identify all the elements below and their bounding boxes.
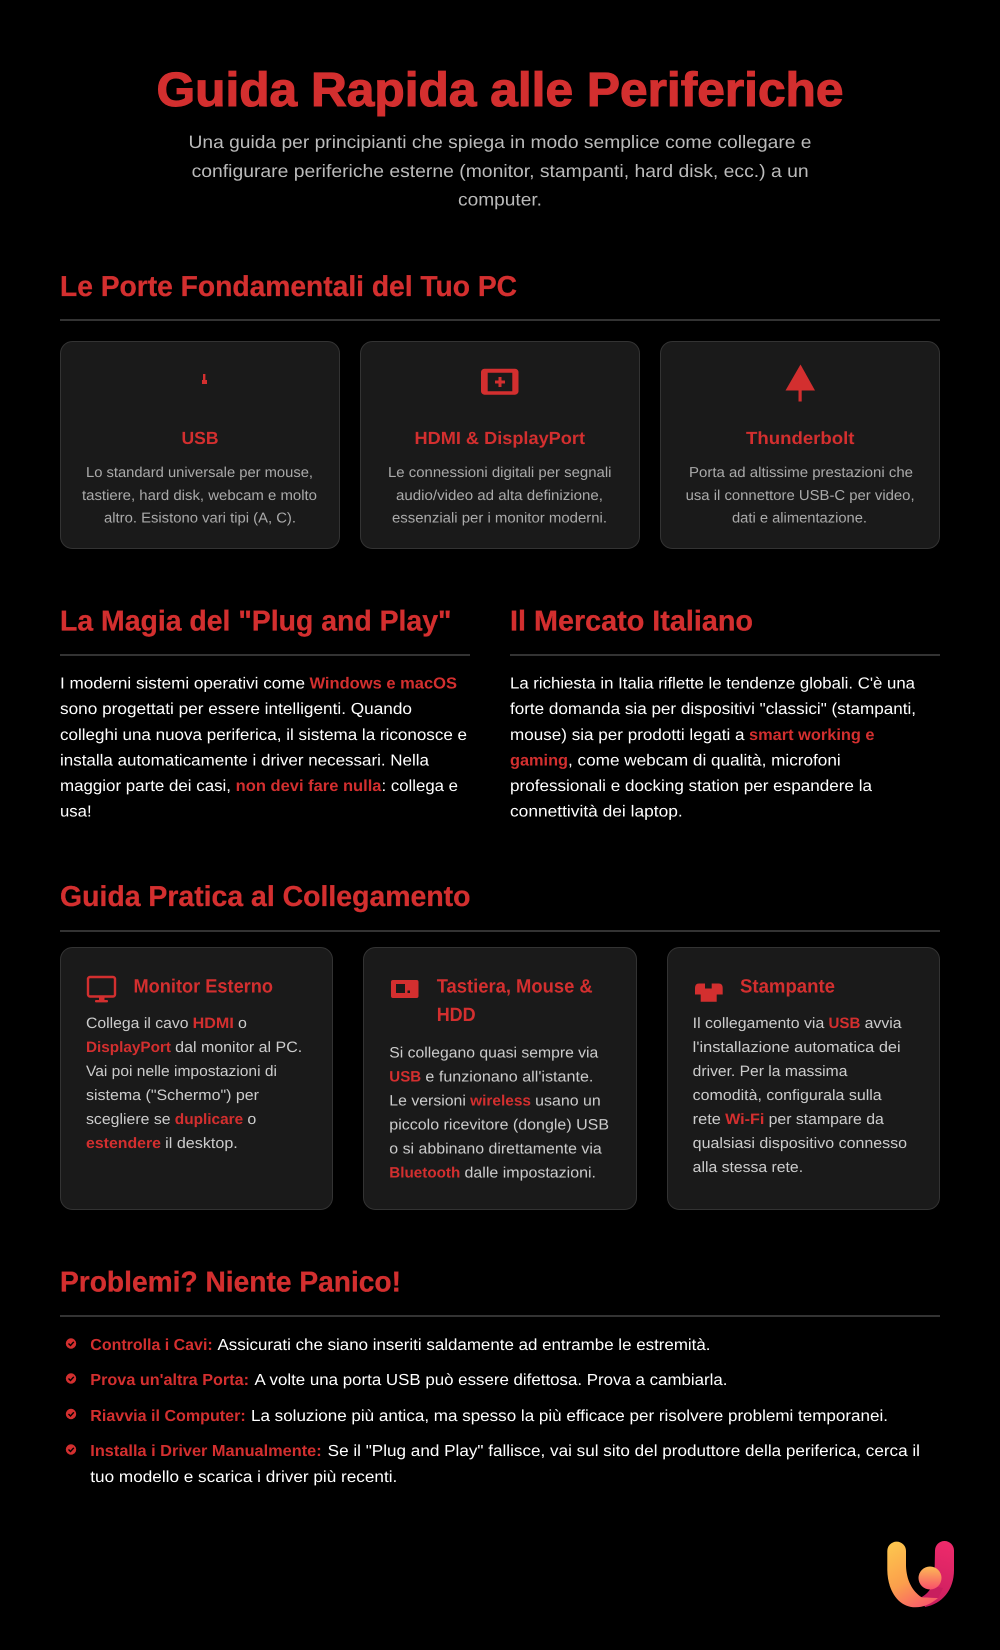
- icon: printer: [695, 984, 723, 1002]
- Monitor text: dal monitor al PC.: [175, 1039, 302, 1056]
- Monitor text: o: [247, 1111, 256, 1128]
- paragraph: mercato: connettività dei laptop.: [510, 804, 683, 821]
- Stampante text: alla stessa rete.: [693, 1159, 803, 1176]
- Thunderbolt description: dati e alimentazione.: [732, 510, 867, 526]
- Monitor text: Collega il cavo: [86, 1015, 188, 1032]
- subtitle: [188, 132, 812, 210]
- USB description: tastiere, hard disk, webcam e molto: [82, 488, 317, 504]
- Tastiera heading: HDD: [437, 1005, 476, 1026]
- Monitor text: scegliere se: [86, 1111, 171, 1128]
- panel: Tastiera Mouse HDD: [364, 948, 636, 1210]
- Monitor text: DisplayPort: [86, 1039, 171, 1056]
- Stampante heading: Stampante: [740, 977, 835, 998]
- heading: mercato: Il Mercato Italiano: [510, 606, 753, 638]
- Monitor text: o: [238, 1015, 247, 1032]
- paragraph: plug and play: maggior parte dei casi,: [60, 778, 231, 795]
- icon: HDMI: [481, 369, 518, 395]
- Stampante text: driver. Per la massima: [693, 1063, 848, 1080]
- Monitor text: duplicare: [175, 1111, 243, 1128]
- paragraph: mercato: [510, 676, 916, 821]
- Monitor text: estendere: [86, 1135, 161, 1152]
- Monitor text: HDMI: [193, 1015, 234, 1032]
- paragraph: plug and play: non devi fare nulla: [236, 778, 382, 795]
- heading: guida pratica: Guida Pratica al Collegamento: [60, 881, 470, 913]
- Thunderbolt description: [686, 465, 915, 526]
- Tastiera text: dalle impostazioni.: [464, 1164, 596, 1182]
- panel: Stampante: [668, 948, 940, 1210]
- item 4: tuo modello e scarica i driver più recenti.: [90, 1469, 397, 1486]
- icon: Thunderbolt: [786, 364, 815, 402]
- paragraph: plug and play: usa!: [60, 804, 92, 821]
- Stampante text: [693, 1015, 907, 1176]
- paragraph: mercato: smart working e: [749, 727, 875, 744]
- icon: USB: [202, 374, 207, 384]
- icon: device: [391, 980, 418, 998]
- panel: Monitor Esterno: [60, 948, 332, 1210]
- item 2: Prova un'altra Porta:: [90, 1372, 249, 1389]
- header: [156, 64, 844, 210]
- USB description: [82, 465, 317, 526]
- heading: porte: Le Porte Fondamentali del Tuo PC: [60, 271, 517, 303]
- Monitor text: Vai poi nelle impostazioni di: [86, 1063, 277, 1080]
- HDMI description: Le connessioni digitali per segnali: [388, 465, 612, 481]
- panel: Thunderbolt: [660, 342, 940, 548]
- Tastiera text: USB: [389, 1068, 421, 1086]
- Stampante text: comodità, configurala sulla: [693, 1087, 882, 1104]
- Stampante text: l'installazione automatica dei: [693, 1039, 901, 1056]
- paragraph: mercato: professionali e docking station per espandere la: [510, 778, 872, 795]
- Stampante text: Wi-Fi: [725, 1111, 764, 1128]
- Monitor heading: Monitor Esterno: [134, 977, 273, 998]
- Stampante text: rete: [693, 1111, 721, 1128]
- Tastiera text: usano un: [535, 1092, 601, 1110]
- Thunderbolt description: Porta ad altissime prestazioni che: [689, 465, 913, 481]
- paragraph: mercato: mouse) sia per prodotti legati a: [510, 727, 745, 744]
- item 4: [66, 1443, 920, 1486]
- Stampante text: Il collegamento via: [693, 1015, 825, 1032]
- paragraph: mercato: forte domanda sia per dispositivi "classici" (stampanti,: [510, 701, 916, 718]
- paragraph: plug and play: installa automaticamente i driver necessari. Nella: [60, 752, 429, 769]
- HDMI description: audio/video ad alta definizione,: [396, 488, 603, 504]
- Tastiera text: Bluetooth: [389, 1164, 460, 1182]
- Stampante text: USB: [828, 1015, 861, 1032]
- subtitle: computer.: [458, 190, 542, 210]
- Tastiera text: e funzionano all'istante.: [425, 1068, 593, 1086]
- Tastiera text: Le versioni: [389, 1092, 466, 1110]
- Thunderbolt description: usa il connettore USB-C per video,: [686, 488, 915, 504]
- paragraph: plug and play: I moderni sistemi operativi come: [60, 676, 305, 692]
- USB description: Lo standard universale per mouse,: [86, 465, 313, 481]
- section: Le Porte Fondamentali: [60, 271, 940, 548]
- HDMI description: essenziali per i monitor moderni.: [392, 510, 607, 526]
- Monitor text: sistema ("Schermo") per: [86, 1087, 259, 1104]
- item 1: Assicurati che siano inseriti saldamente ad entrambe le estremità.: [218, 1337, 710, 1354]
- checklist: [66, 1337, 920, 1486]
- section: Plug and Play: [60, 606, 470, 821]
- Tastiera text: wireless: [469, 1092, 531, 1110]
- item 1: Controlla i Cavi:: [90, 1337, 213, 1354]
- Stampante text: per stampare da: [769, 1111, 884, 1128]
- heading: problemi: Problemi? Niente Panico!: [60, 1267, 401, 1299]
- USB description: altro. Esistono vari tipi (A, C).: [104, 510, 296, 526]
- Thunderbolt title: Thunderbolt: [746, 428, 855, 448]
- Tastiera heading: Tastiera, Mouse &: [437, 977, 593, 998]
- paragraph: mercato: La richiesta in Italia riflette le tendenze globali. C'è una: [510, 676, 915, 692]
- section: Guida Pratica: [60, 881, 940, 1210]
- Tastiera text: piccolo ricevitore (dongle) USB: [389, 1116, 609, 1134]
- title: Guida Rapida alle Periferiche: [156, 64, 844, 117]
- paragraph: plug and play: [60, 676, 467, 821]
- paragraph: mercato: gaming: [510, 752, 568, 769]
- HDMI description: [388, 465, 612, 526]
- heading: plug and play: La Magia del "Plug and Play": [60, 606, 452, 638]
- Stampante text: qualsiasi dispositivo connesso: [693, 1135, 907, 1152]
- Stampante text: avvia: [865, 1015, 902, 1032]
- paragraph: mercato: , come webcam di qualità, microfoni: [568, 752, 841, 769]
- paragraph: plug and play: Windows e macOS: [310, 676, 457, 692]
- item 4: Installa i Driver Manualmente:: [90, 1443, 322, 1460]
- paragraph: plug and play: : collega e: [382, 778, 458, 795]
- Monitor text: il desktop.: [165, 1135, 238, 1152]
- Tastiera text: o si abbinano direttamente via: [389, 1140, 602, 1158]
- Monitor text: [86, 1015, 302, 1152]
- panel: USB: [60, 342, 340, 548]
- icon: monitor: [88, 977, 115, 1002]
- item 3: La soluzione più antica, ma spesso la più efficace per risolvere problemi temporanei.: [251, 1408, 888, 1425]
- item 4: Se il "Plug and Play" fallisce, vai sul sito del produttore della periferica, cerca il: [328, 1443, 920, 1460]
- paragraph: plug and play: colleghi una nuova periferica, il sistema la riconosce e: [60, 727, 467, 744]
- subtitle: Una guida per principianti che spiega in modo semplice come collegare e: [188, 132, 812, 152]
- panel: HDMI: [360, 342, 640, 548]
- logo: [887, 1541, 954, 1607]
- USB title: USB: [182, 428, 218, 448]
- section: Problemi: [60, 1267, 940, 1486]
- HDMI title: HDMI & DisplayPort: [414, 428, 585, 448]
- Tastiera heading: [437, 977, 593, 1026]
- section: Mercato Italiano: [510, 606, 940, 821]
- Tastiera text: Si collegano quasi sempre via: [389, 1044, 599, 1062]
- item 2: [66, 1372, 728, 1389]
- paragraph: plug and play: sono progettati per essere intelligenti. Quando: [60, 701, 412, 718]
- item 3: Riavvia il Computer:: [90, 1408, 246, 1425]
- item 2: A volte una porta USB può essere difettosa. Prova a cambiarla.: [254, 1372, 728, 1389]
- Tastiera text: [389, 1044, 609, 1182]
- subtitle: configurare periferiche esterne (monitor, stampanti, hard disk, ecc.) a un: [192, 161, 809, 181]
